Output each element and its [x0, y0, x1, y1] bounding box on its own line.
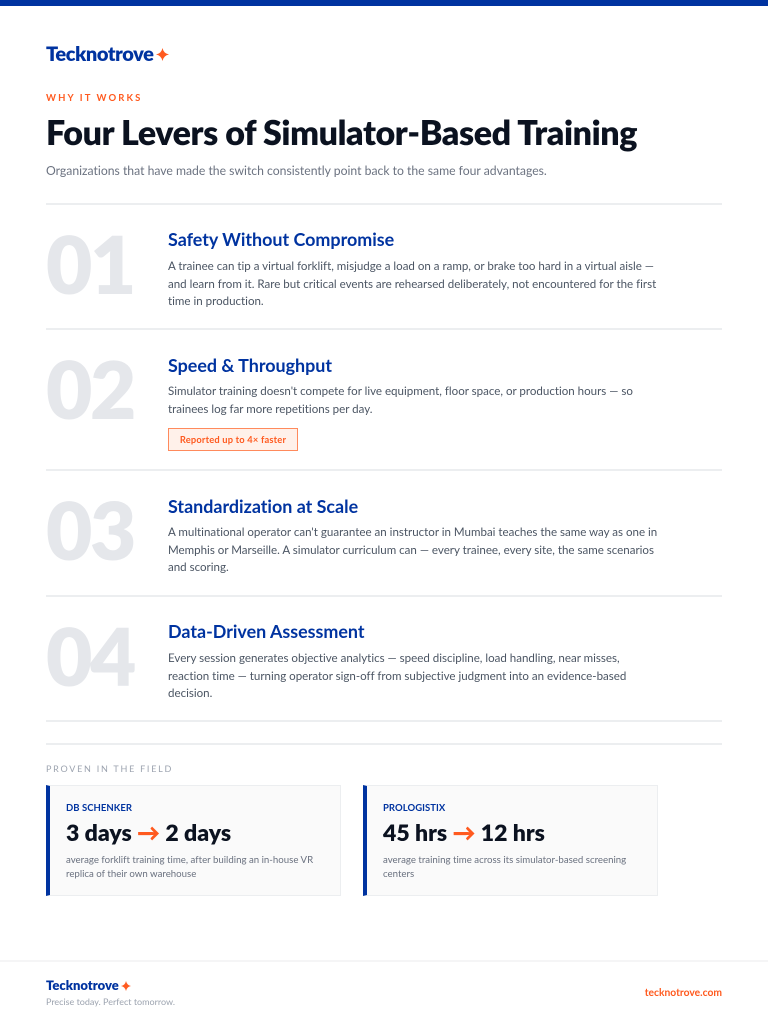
eyebrow: WHY IT WORKS — [46, 93, 142, 104]
body 01: and learn from it. Rare but critical events are rehearsed deliberately, not encountered for the first — [168, 278, 656, 290]
stat: 45 hrs → 12 hrs — [383, 818, 545, 846]
body 04: reaction time — turning operator sign-off from subjective judgment into an evidence-based — [168, 670, 626, 682]
body 01: A trainee can tip a virtual forklift, misjudge a load on a ramp, or brake too hard in a virtual aisle — — [168, 260, 654, 273]
section label: PROVEN IN THE FIELD — [46, 763, 173, 774]
title: Four Levers of Simulator-Based Training — [46, 112, 637, 153]
body 04: Every session generates objective analytics — speed discipline, load handling, near misses, — [168, 652, 620, 665]
description: average forklift training time, after building an in-house VR — [66, 854, 313, 866]
heading 01: Safety Without Compromise — [168, 228, 394, 250]
top bar — [0, 0, 768, 6]
body 03: A multinational operator can't guarantee an instructor in Mumbai teaches the same way as one in — [168, 526, 657, 539]
description: replica of their own warehouse — [66, 868, 196, 880]
footer tagline: Precise today. Perfect tomorrow. — [46, 996, 175, 1007]
footer logo: Tecknotrove — [46, 977, 119, 993]
lever 04 — [46, 608, 626, 704]
footer url: tecknotrove.com — [645, 987, 722, 999]
body 03 — [168, 526, 657, 574]
subtitle: Organizations that have made the switch consistently point back to the same four advantages. — [46, 163, 547, 178]
lever 03 — [46, 482, 657, 578]
body 02: Simulator training doesn't compete for live equipment, floor space, or production hours — so — [168, 385, 633, 398]
number 03: 03 — [46, 482, 134, 578]
body 01: time in production. — [168, 295, 264, 308]
heading 02: Speed & Throughput — [168, 354, 332, 376]
heading 03: Standardization at Scale — [168, 495, 358, 517]
logo: Tecknotrove — [46, 42, 154, 66]
body 03: and scoring. — [168, 561, 229, 574]
description: average training time across its simulator-based screening — [383, 854, 626, 866]
badge: Reported up to 4× faster — [180, 434, 286, 445]
number 02: 02 — [46, 341, 134, 437]
body 04: decision. — [168, 687, 212, 700]
body 04 — [168, 652, 626, 700]
badge — [168, 428, 298, 451]
body 03: Memphis or Marseille. A simulator curriculum can — every trainee, every site, the same scenarios — [168, 544, 654, 556]
body 01 — [168, 260, 656, 308]
card: Prologistix — [363, 785, 658, 896]
description: centers — [383, 868, 414, 880]
company: PROLOGISTIX — [383, 803, 445, 814]
card: DB Schenker — [46, 785, 341, 896]
description — [66, 854, 313, 880]
lever 02 — [46, 341, 633, 451]
stat: 3 days → 2 days — [66, 818, 231, 846]
number 01: 01 — [46, 216, 134, 312]
number 04: 04 — [46, 608, 134, 704]
lever 01 — [46, 216, 656, 312]
heading 04: Data-Driven Assessment — [168, 620, 365, 642]
description — [383, 854, 626, 880]
body 02 — [168, 385, 633, 416]
company: DB SCHENKER — [66, 803, 132, 814]
body 02: trainees log far more repetitions per day. — [168, 402, 372, 416]
